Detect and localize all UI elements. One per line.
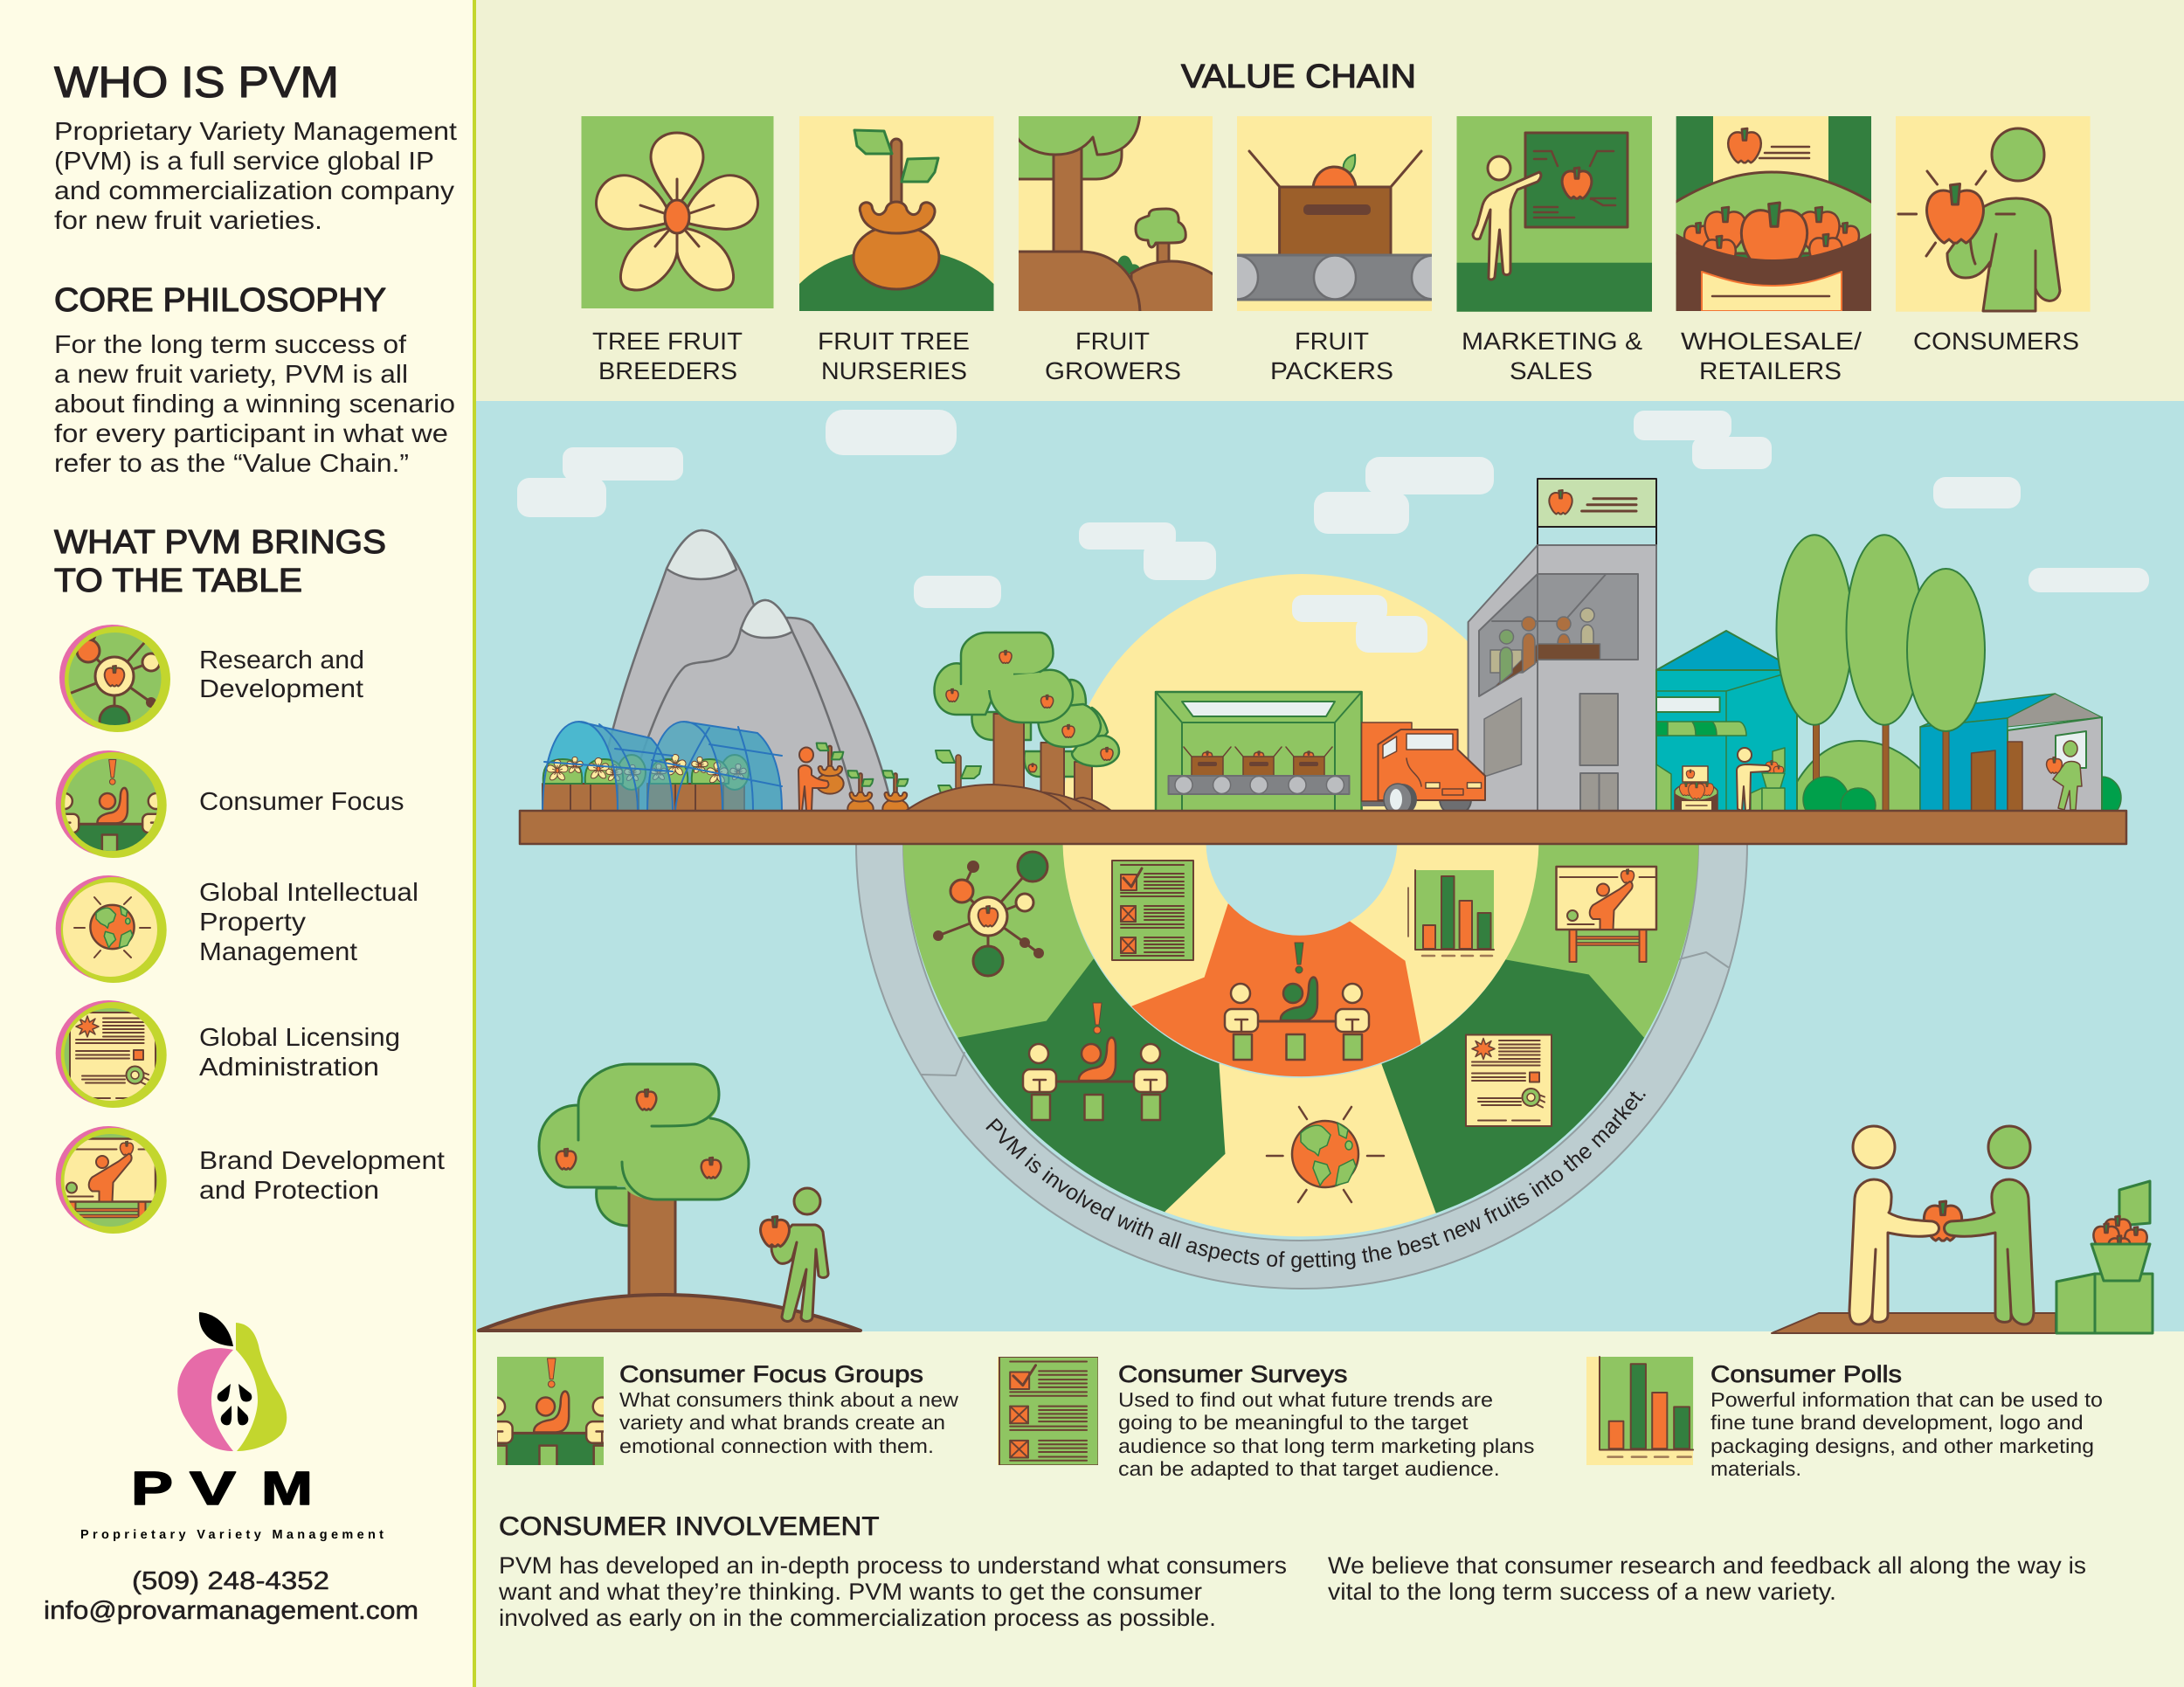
text: focus groups body: emotional connection with them.: [619, 1435, 934, 1457]
icon: sapling tile: [799, 116, 994, 311]
icon: presenter tile: [1457, 116, 1652, 312]
heading: core philosophy: CORE PHILOSOPHY: [54, 282, 386, 319]
heading: consumer involvement: CONSUMER INVOLVEMENT: [499, 1512, 879, 1541]
back tree foliage: [971, 680, 1108, 777]
label: global intellectual property management: Global Intellectual: [199, 879, 418, 907]
text: core philosophy body: about finding a winning scenario: [54, 391, 455, 418]
barn: [1920, 694, 2102, 812]
icon: market stall tile: [1669, 116, 1878, 311]
background: left column: [0, 0, 473, 1687]
outer grey caption ring: [856, 843, 1747, 1289]
label: fruit packers: PACKERS: [1270, 357, 1393, 384]
scene: mountains: [594, 530, 893, 811]
label: fruit growers: [1045, 328, 1181, 384]
awning: [1656, 722, 1746, 736]
heading: consumer polls: Consumer Polls: [1711, 1361, 1902, 1387]
icon: focus group centre: [1225, 943, 1369, 1060]
clouds: [517, 410, 2149, 653]
text: core philosophy body: refer to as the “Value Chain.”: [54, 450, 409, 478]
text: polls body: packaging designs, and other marketing: [1711, 1435, 2094, 1457]
segment: surveys: [1063, 843, 1228, 1006]
icon: research network: [933, 852, 1047, 976]
contact details: [44, 1567, 418, 1625]
icon: packing box tile: [1237, 116, 1432, 311]
label: marketing and sales: MARKETING &: [1462, 328, 1642, 355]
mounds: [906, 785, 1111, 811]
panel: consumer surveys: [998, 1357, 1534, 1480]
text: consumer involvement left: want and what they’re thinking. PVM wants to get the consumer: [498, 1579, 1202, 1605]
text: who is PVM body: (PVM) is a full service global IP: [54, 148, 434, 176]
shrubs: [1803, 777, 2121, 823]
list item: global intellectual property management: [56, 875, 418, 983]
label: fruit tree nurseries: NURSERIES: [821, 357, 967, 384]
label: brand development and protection: [199, 1147, 445, 1205]
packing boxes: [1184, 747, 1332, 776]
label: global intellectual property management: [199, 879, 418, 966]
text: consumer involvement left: PVM has developed an in-depth process to understand what consumers: [499, 1552, 1287, 1579]
heading: what PVM brings to the table: WHAT PVM BRINGS: [54, 524, 386, 561]
flowering bushes: [543, 755, 749, 790]
sun dome: [1063, 574, 1540, 812]
label: tree fruit breeders: BREEDERS: [598, 357, 737, 384]
icon: survey sheet: [1112, 861, 1193, 960]
text: focus groups body: [619, 1388, 958, 1457]
tree: [539, 1064, 749, 1297]
label: fruit tree nurseries: [818, 328, 970, 384]
label: tree fruit breeders: TREE FRUIT: [592, 328, 743, 355]
sapling: [936, 750, 981, 793]
scene: packing house: [1156, 692, 1362, 812]
text: core philosophy body: a new fruit variety, PVM is all: [54, 361, 408, 389]
label: marketing and sales: [1462, 328, 1642, 384]
front tall tree: [1907, 569, 1985, 812]
meeting room window: [1479, 574, 1638, 696]
segment: research: [903, 843, 1094, 1038]
logo: PVM pear and apple: P: [131, 1462, 173, 1515]
label: brand development and protection: Brand Development: [199, 1147, 445, 1175]
heading: who is PVM: WHO IS PVM: [54, 58, 339, 107]
label: global licensing administration: [199, 1024, 400, 1082]
contact details: (509) 248-4352: [132, 1567, 329, 1595]
hill: [479, 1295, 860, 1331]
logo: PVM pear and apple: [80, 1312, 384, 1542]
icon: brand badge: [56, 1126, 167, 1234]
value chain step: consumers: [1896, 116, 2091, 355]
label: research and development: Development: [199, 675, 363, 703]
background: value chain band: [476, 0, 2184, 402]
list item: brand development and protection: [56, 1126, 445, 1234]
text: consumer involvement right: We believe that consumer research and feedback all along the way is: [1328, 1552, 2086, 1579]
label: fruit tree nurseries: FRUIT TREE: [818, 328, 970, 355]
label: wholesale and retailers: RETAILERS: [1699, 357, 1842, 384]
label: fruit growers: FRUIT: [1075, 328, 1150, 355]
conveyor: [1169, 776, 1349, 794]
text: polls body: [1711, 1388, 2103, 1480]
label: fruit packers: FRUIT: [1295, 328, 1369, 355]
text: core philosophy body: for every participant in what we: [54, 420, 448, 448]
person: green: [1945, 1126, 2034, 1324]
text: consumer involvement left: involved as early on in the commercialization process as possible.: [499, 1605, 1216, 1631]
greenhouse glass: [543, 722, 782, 811]
value chain step: fruit tree nurseries: [799, 116, 994, 384]
miniature stall: [1675, 766, 1717, 812]
text: who is PVM body: Proprietary Variety Management: [54, 118, 457, 146]
label: fruit packers: [1270, 328, 1393, 384]
value chain step: marketing and sales: [1457, 116, 1652, 384]
contact details: info@provarmanagement.com: [44, 1597, 418, 1625]
planters: [543, 784, 744, 811]
segment: central focus group: [1132, 904, 1420, 1076]
label: global licensing administration: Global Licensing: [199, 1024, 400, 1052]
text: polls body: materials.: [1711, 1457, 1801, 1480]
scene: fruit store: [1656, 631, 1797, 812]
icon: research badge: [59, 625, 170, 732]
text: polls body: fine tune brand development, logo and: [1711, 1411, 2084, 1434]
logo: PVM pear and apple: V: [190, 1462, 236, 1515]
panel: consumer polls: [1586, 1357, 2103, 1480]
icon: consumer tile: [1896, 116, 2091, 312]
text: core philosophy body: For the long term success of: [54, 331, 407, 359]
icon: focus groups: [497, 1357, 604, 1465]
panel: left column text: [54, 58, 457, 599]
label: research and development: Research and: [199, 646, 364, 674]
column divider: [473, 0, 476, 1687]
icon: globe: [1267, 1107, 1384, 1202]
shop assistant: [1737, 748, 1785, 812]
tall trees: [1777, 535, 1922, 812]
scene: office building: [1469, 479, 1656, 812]
text: surveys body: Used to find out what future trends are: [1118, 1388, 1493, 1411]
glass overlay over back sections: [579, 722, 782, 811]
label: global intellectual property management: Property: [199, 909, 307, 937]
wheel: PVM services half ring: [855, 845, 1748, 1289]
value chain step: wholesale and retailers: [1669, 116, 1878, 384]
greenhouse frames: [543, 722, 782, 811]
apples on trees: [946, 650, 1113, 772]
label: fruit growers: GROWERS: [1045, 357, 1181, 384]
person holding apple: [761, 1188, 828, 1321]
foreground: apple tree and consumer on hill: [479, 1064, 860, 1331]
icon: globe badge: [56, 875, 167, 983]
segment: polls: [1350, 843, 1538, 1044]
list item: consumer focus: [52, 750, 404, 859]
text: polls body: Powerful information that can be used to: [1711, 1388, 2103, 1411]
heading: what PVM brings to the table: TO THE TABLE: [54, 563, 302, 599]
logo: PVM pear and apple: M: [261, 1462, 313, 1515]
label: tree fruit breeders: [592, 328, 743, 384]
icon: licence certificate: [1466, 1034, 1552, 1126]
icon: flower tile: [582, 116, 774, 308]
person: yellow: [1849, 1126, 1939, 1324]
list item: global licensing administration: [56, 1000, 400, 1108]
label: research and development: [199, 646, 364, 703]
label: wholesale and retailers: [1681, 328, 1862, 384]
text: surveys body: can be adapted to that target audience.: [1118, 1457, 1500, 1480]
label: wholesale and retailers: WHOLESALE/: [1681, 328, 1862, 355]
segment: global IP: [1165, 1064, 1436, 1236]
label: global licensing administration: Administration: [199, 1054, 379, 1082]
icon: presentation board: [1557, 867, 1656, 962]
scene: delivery truck: [1362, 723, 1485, 815]
value chain step: tree fruit breeders: [582, 116, 774, 384]
label: consumers: CONSUMERS: [1913, 328, 2079, 355]
text: consumer involvement left: [498, 1552, 1287, 1631]
heading: consumer surveys: Consumer Surveys: [1118, 1361, 1347, 1387]
segment: left focus group: [958, 959, 1226, 1212]
label: brand development and protection: and Protection: [199, 1177, 379, 1205]
text: focus groups body: What consumers think about a new: [619, 1388, 958, 1411]
scene: nursery worker with saplings: [798, 743, 909, 819]
background: bottom text band: [476, 1331, 2184, 1687]
icon: consumer focus badge: [52, 750, 169, 859]
scene: orchard: [906, 633, 1119, 811]
text: focus groups body: variety and what brands create an: [619, 1411, 945, 1434]
text: who is PVM body: for new fruit varieties.: [54, 207, 322, 235]
icon: bar chart: [1408, 870, 1494, 956]
value chain step: fruit growers: [1013, 109, 1216, 384]
value chain step: fruit packers: [1237, 116, 1432, 379]
list item: research and development: [59, 625, 363, 732]
produce crate and basket: [2056, 1181, 2153, 1333]
ground beam: [520, 811, 2126, 844]
scene: greenhouses and planters: [543, 722, 782, 811]
label: consumer focus: Consumer Focus: [199, 788, 404, 816]
trunks: [994, 714, 1092, 805]
text: who is PVM body: and commercialization company: [54, 177, 455, 205]
icon: licence badge: [56, 1000, 167, 1108]
label: marketing and sales: SALES: [1510, 357, 1593, 384]
label: global intellectual property management: Management: [199, 938, 357, 966]
text: surveys body: audience so that long term marketing plans: [1118, 1435, 1534, 1457]
foreground: handshake over apple: [1772, 1126, 2153, 1333]
billboard: [1538, 479, 1656, 545]
segment: licensing: [1382, 959, 1644, 1213]
segment: brand development: [1506, 843, 1698, 1037]
text: surveys body: [1118, 1388, 1534, 1480]
heading: value chain: VALUE CHAIN: [1181, 59, 1416, 95]
curved caption: PVM is involved with all aspects of getting the best new fruits into the market.: [985, 1091, 1646, 1272]
background: sky panel: [476, 401, 2184, 1332]
icon: focus group left: [1023, 1003, 1167, 1120]
text: surveys body: going to be meaningful to the target: [1118, 1411, 1469, 1434]
logo: PVM pear and apple: Proprietary Variety Management: [80, 1528, 384, 1542]
scene: tall trees and barn: [1777, 535, 2121, 823]
panel: consumer focus groups: [480, 1357, 958, 1469]
heading: what PVM brings to the table: [54, 524, 386, 599]
icon: polls: [1586, 1357, 1693, 1465]
icon: surveys: [998, 1357, 1098, 1465]
text: core philosophy body: [54, 331, 455, 478]
text: consumer involvement right: vital to the long term success of a new variety.: [1328, 1579, 1836, 1605]
tree foliage: [935, 633, 1119, 766]
text: consumer involvement right: [1328, 1552, 2086, 1605]
text: who is PVM body: [54, 118, 457, 235]
heading: consumer focus groups: Consumer Focus Groups: [619, 1361, 923, 1387]
icon: orchard tile: [1013, 109, 1216, 315]
